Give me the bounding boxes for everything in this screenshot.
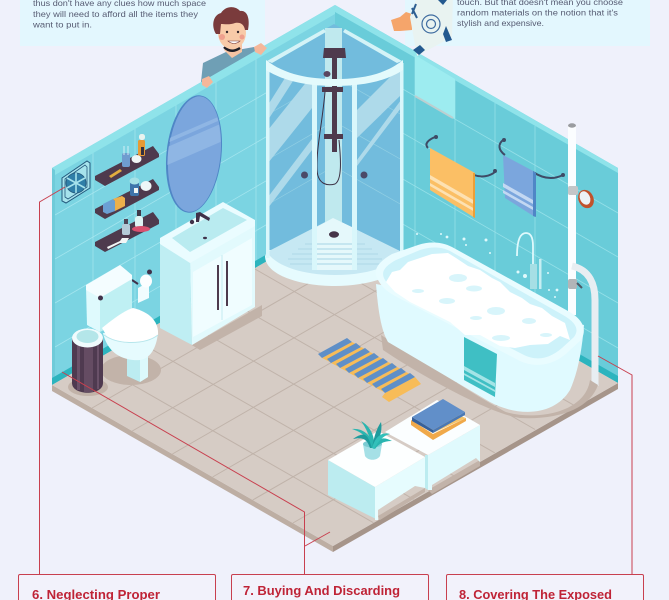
card 7: 7. Buying And Discarding	[243, 584, 400, 598]
text panel: top right: stylish and expensive.	[457, 18, 544, 28]
shower glass reflections	[268, 66, 401, 208]
card 7	[232, 574, 428, 600]
bathtub	[376, 243, 598, 418]
text panel: top left	[20, 0, 265, 46]
leader line: card 8 to pipe	[598, 356, 632, 574]
card 6	[18, 574, 216, 600]
toilet paper	[132, 270, 152, 303]
ottoman: front	[328, 431, 425, 520]
sink cabinet	[160, 202, 262, 350]
toilet	[86, 265, 161, 385]
bath mat	[318, 338, 421, 402]
hand holding tile	[391, 0, 453, 56]
shelf 3	[95, 210, 159, 252]
right wall	[335, 5, 618, 383]
mirror	[166, 95, 222, 213]
leader line: card 6 to vent	[40, 187, 65, 574]
shower column and head	[301, 48, 368, 185]
text panel: top right	[405, 0, 650, 46]
man's hands on wall	[202, 43, 267, 88]
shelf 2	[95, 178, 159, 219]
shower base tray	[265, 218, 405, 286]
card 8	[446, 574, 644, 600]
ottoman: back	[385, 400, 480, 494]
stack of books	[411, 399, 466, 440]
text panel: top left: want to put in.	[32, 20, 92, 30]
bath foam	[386, 253, 570, 348]
trash bin	[68, 328, 108, 396]
shelf 1	[95, 134, 159, 186]
vent fan	[62, 161, 90, 203]
shower frame	[266, 29, 404, 270]
shower enclosure	[265, 24, 405, 286]
missing tile patch on wall	[415, 55, 455, 119]
left wall	[52, 5, 335, 385]
illustration: man peeking over wall	[201, 7, 266, 96]
floor	[52, 222, 618, 552]
bath towel	[464, 337, 497, 397]
wall pipe and gauge	[568, 123, 597, 386]
towel: blue	[499, 138, 565, 217]
text panel: top left: they will need to afford all the items they	[33, 9, 199, 19]
towel: yellow	[426, 135, 497, 218]
potted plant	[352, 421, 392, 460]
leader line: card 7 to bin and floor	[62, 372, 330, 574]
bath faucet and bubbles	[416, 233, 558, 298]
text panel: top right: random materials on the notion that it's	[457, 8, 618, 18]
